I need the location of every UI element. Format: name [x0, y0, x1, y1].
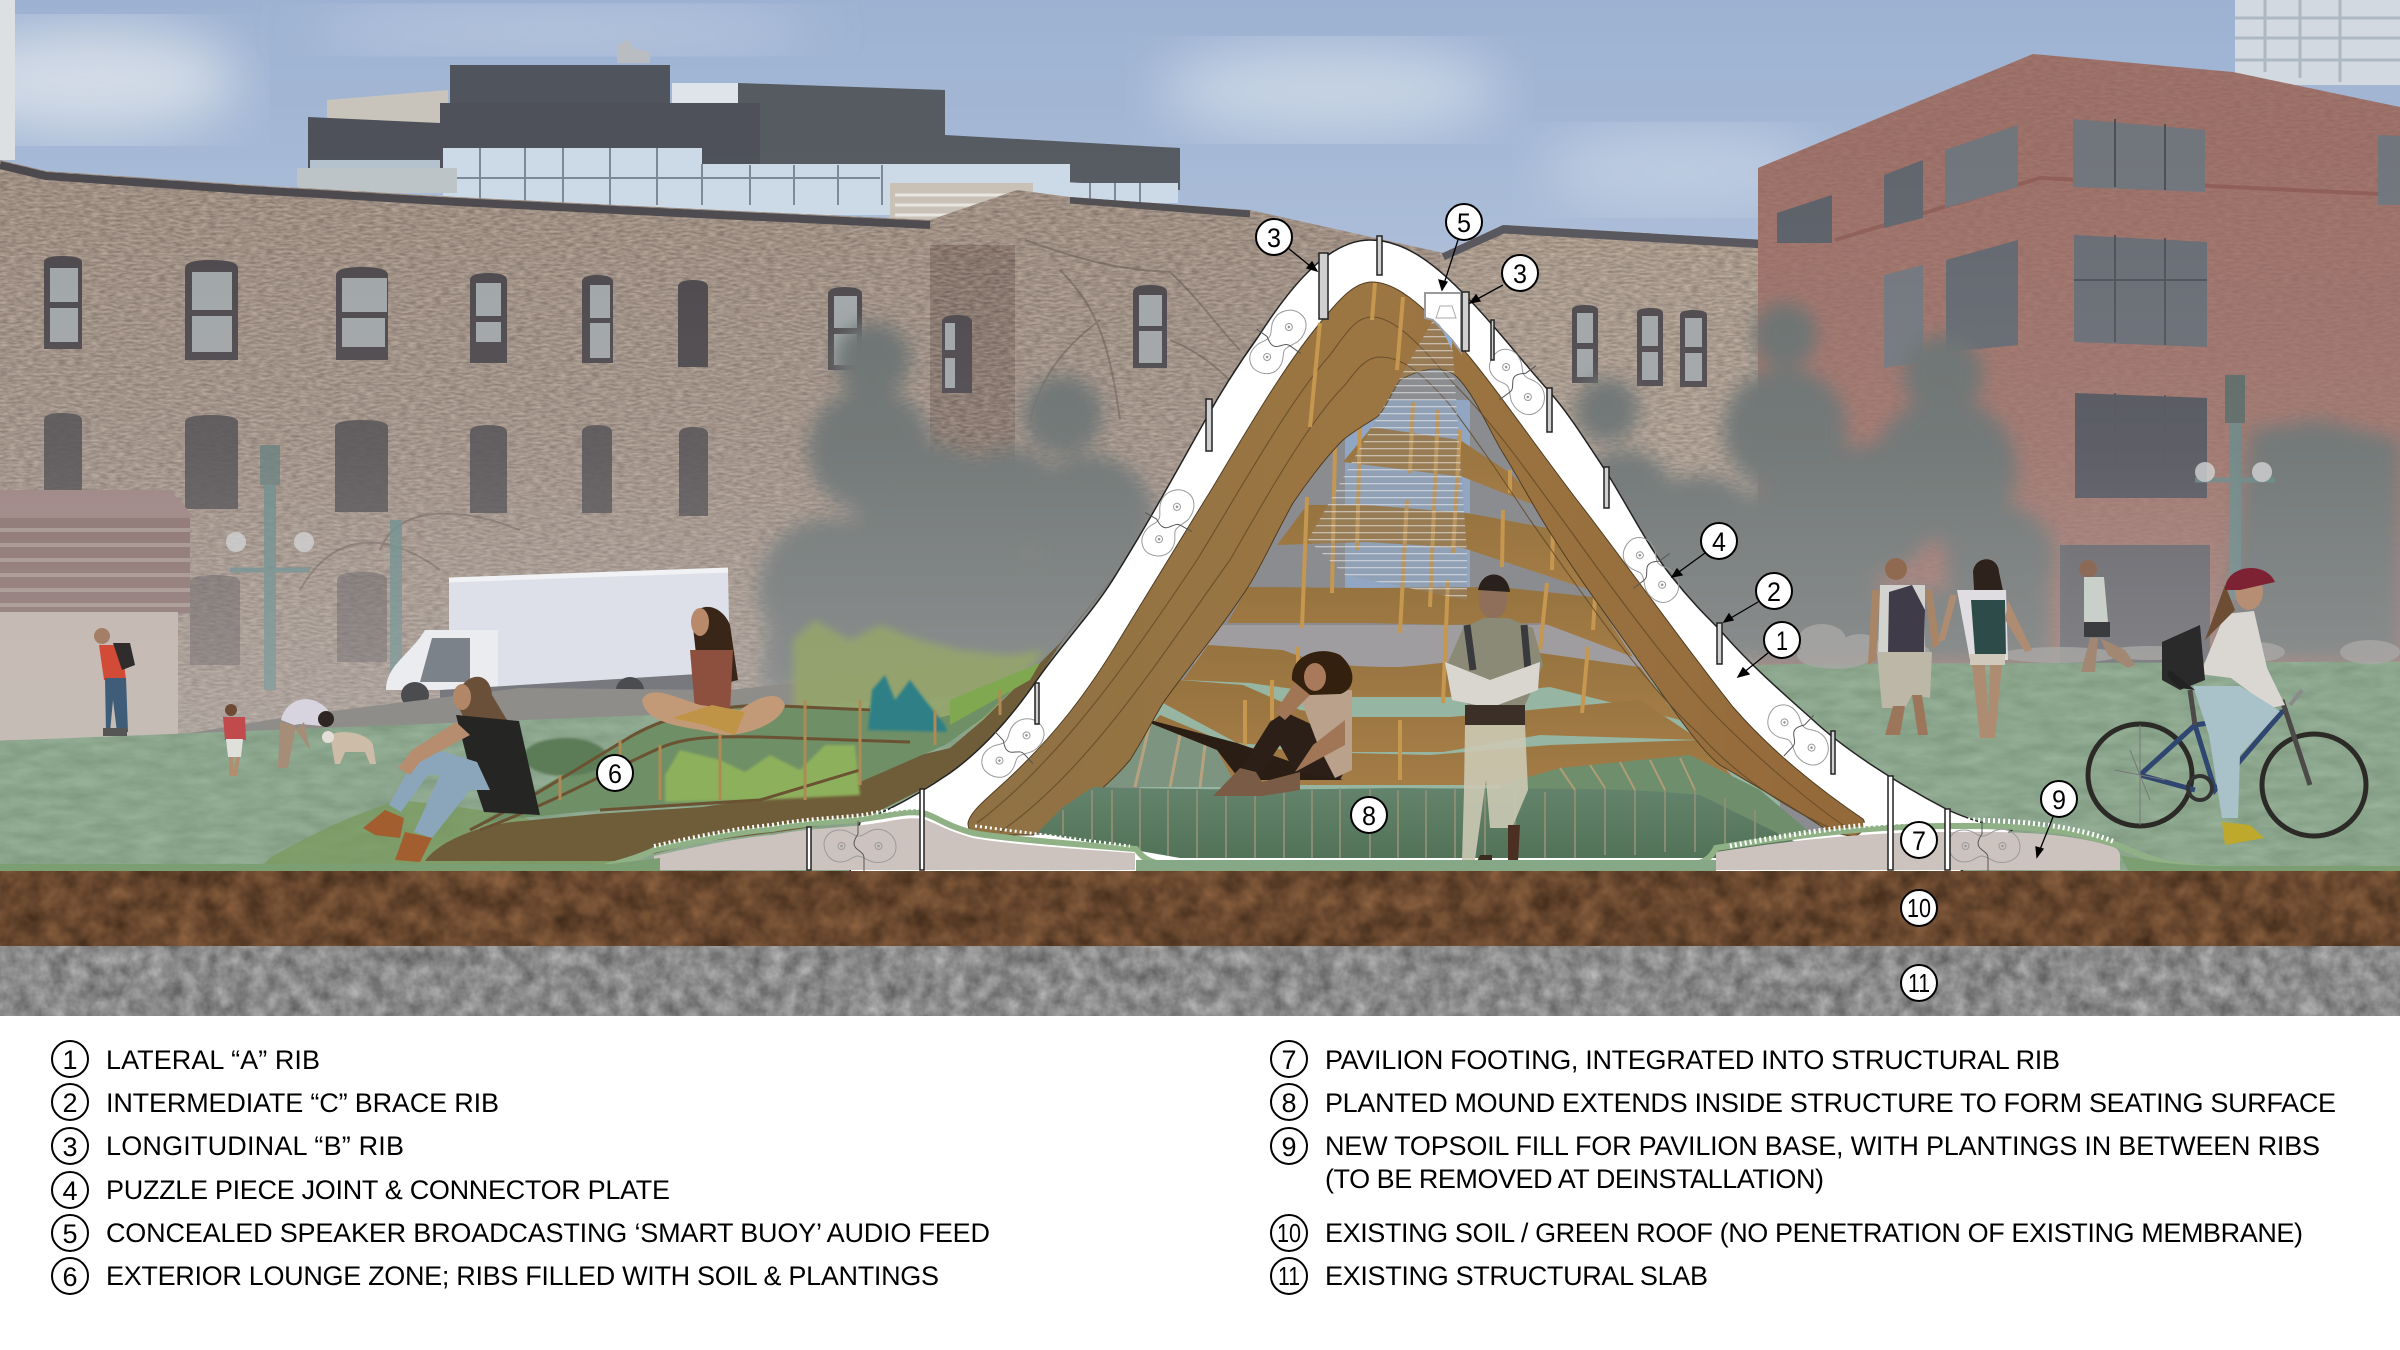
brick buildings [0, 160, 1758, 741]
legend item 10: EXISTING SOIL / GREEN ROOF (NO PENETRATION OF EXISTING MEMBRANE) [1325, 1218, 2303, 1248]
planted wing structure [260, 573, 1117, 868]
bicycle [2088, 690, 2366, 836]
ivy [300, 240, 1262, 590]
legend item 8: PLANTED MOUND EXTENDS INSIDE STRUCTURE TO FORM SEATING SURFACE [1325, 1088, 2336, 1118]
legend item 4: PUZZLE PIECE JOINT & CONNECTOR PLATE [106, 1175, 670, 1205]
dog [322, 731, 376, 764]
marker 10 [1901, 890, 1937, 926]
topsoil edge and grass [600, 808, 2220, 868]
legend item 2: INTERMEDIATE “C” BRACE RIB [106, 1088, 499, 1118]
person: man reading newspaper [1445, 574, 1543, 868]
marker 4: 4 [1712, 527, 1726, 557]
vertical slats [1245, 402, 1595, 780]
marker 6 [597, 755, 633, 791]
legend area [0, 1016, 2400, 1350]
pavilion white lateral rib [850, 240, 2012, 872]
legend item 1 [52, 1041, 320, 1077]
marker 11: 11 [1908, 968, 1930, 998]
legend item 6: EXTERIOR LOUNGE ZONE; RIBS FILLED WITH SOIL & PLANTINGS [106, 1261, 939, 1291]
legend item 3: LONGITUDINAL “B” RIB [106, 1131, 404, 1161]
bright plantings [665, 745, 860, 802]
marker 4 [1701, 523, 1737, 559]
marker 3 right [1502, 255, 1538, 291]
legend item 2: 2 [62, 1088, 78, 1118]
wood slats over arch [1310, 283, 1403, 427]
delivery truck [386, 570, 730, 708]
marker 3 left [1256, 219, 1292, 255]
marker 11 [1901, 965, 1937, 1001]
pavilion interior view [1036, 370, 1826, 835]
marker 1 [1764, 622, 1800, 658]
marker 5: 5 [1457, 208, 1471, 238]
marker 7: 7 [1912, 826, 1926, 856]
person: man with red shirt [94, 628, 135, 736]
trees [758, 303, 2400, 705]
haze over background [0, 150, 2400, 750]
upper row frames [44, 256, 1707, 393]
legend item 11: 11 [1278, 1261, 1300, 1291]
person: woman with backpack [1938, 559, 2032, 738]
concealed speaker box [1425, 293, 1461, 352]
marker 7 [1901, 822, 1937, 858]
distant towers [0, 0, 2400, 160]
pavement and lawn [0, 662, 2400, 871]
marker 10: 10 [1907, 893, 1931, 923]
callout markers [597, 204, 2077, 1001]
leader lines [1288, 240, 2053, 857]
marker 2 [1756, 573, 1792, 609]
windows left building [44, 256, 1707, 665]
marker 6: 6 [608, 759, 622, 789]
person: cyclist with bicycle [2088, 568, 2366, 845]
person: woman sitting cross-legged [642, 607, 785, 735]
marker 5 [1446, 204, 1482, 240]
marker 1: 1 [1776, 626, 1788, 656]
legend item 5: 5 [62, 1219, 78, 1249]
marker 2: 2 [1767, 577, 1781, 607]
arch contour lines [977, 317, 1850, 832]
legend item 9: 9 [1281, 1132, 1297, 1162]
grass apron [260, 800, 625, 868]
legend item 10: 10 [1277, 1218, 1301, 1248]
far-field people at left [94, 628, 376, 776]
lower row frames [44, 413, 708, 516]
sky [0, 0, 2400, 420]
legend item 6: 6 [62, 1262, 78, 1292]
person: child [223, 704, 246, 776]
legend item 7: PAVILION FOOTING, INTEGRATED INTO STRUCTURAL RIB [1325, 1045, 2060, 1075]
background couple walking [1868, 558, 2032, 738]
red brick building [1750, 50, 2400, 710]
dark bushes [523, 738, 607, 776]
horizontal wavy ribs [1120, 427, 1740, 785]
planted surface [470, 668, 1035, 828]
marker 3 right: 3 [1513, 259, 1527, 289]
marker 9 [2041, 781, 2077, 817]
person: jogger [2079, 560, 2135, 672]
intermediate C brace ribs [807, 236, 1950, 870]
wing body [425, 573, 1117, 861]
person: seated man with jacket [363, 677, 540, 862]
legend item 1: LATERAL “A” RIB [106, 1045, 320, 1075]
marker 8: 8 [1362, 801, 1376, 831]
legend item 9: (TO BE REMOVED AT DEINSTALLATION) [1325, 1164, 1824, 1194]
person: man with backpack [1868, 558, 1940, 735]
teal tuft [868, 675, 947, 732]
planted seating mound [1037, 755, 1812, 858]
green ground strip [0, 855, 2400, 874]
person: man bending [278, 699, 334, 768]
legend item 8: 8 [1281, 1088, 1297, 1118]
marker 8 [1351, 797, 1387, 833]
rear mound [1104, 724, 1232, 787]
legend item 9: NEW TOPSOIL FILL FOR PAVILION BASE, WITH PLANTINGS IN BETWEEN RIBS [1325, 1131, 2320, 1161]
legend item 3: 3 [62, 1132, 78, 1162]
marker 9: 9 [2052, 785, 2066, 815]
concrete slab [0, 946, 2400, 1016]
wood rib lines [470, 705, 910, 830]
rocks seen through pavilion [1194, 625, 1652, 680]
legend item 9 [1271, 1128, 2320, 1194]
marker 3 left: 3 [1267, 223, 1281, 253]
background glass building [297, 40, 1180, 230]
person: woman seated on phone [1213, 651, 1352, 796]
reeds [793, 620, 1045, 725]
bright ledge [950, 663, 1040, 725]
window panes [50, 268, 1702, 388]
rock pile behind lawn [1797, 624, 2400, 669]
soil layer [0, 871, 2400, 946]
legend item 7: 7 [1281, 1045, 1297, 1075]
legend item 4: 4 [62, 1176, 78, 1206]
puzzle piece joints [824, 298, 2020, 871]
footing right [1716, 832, 2120, 870]
small mauve building at left [0, 490, 195, 740]
legend item 11: EXISTING STRUCTURAL SLAB [1325, 1261, 1708, 1291]
legend item 1: 1 [62, 1045, 78, 1075]
speaker sound cone [1308, 320, 1467, 600]
shadow wedge behind seated figure [1150, 720, 1343, 780]
legend item 5: CONCEALED SPEAKER BROADCASTING ‘SMART BUOY’ AUDIO FEED [106, 1218, 990, 1248]
main wood arch [968, 282, 1865, 836]
lamp posts [226, 375, 2275, 690]
footing left [654, 818, 1135, 870]
